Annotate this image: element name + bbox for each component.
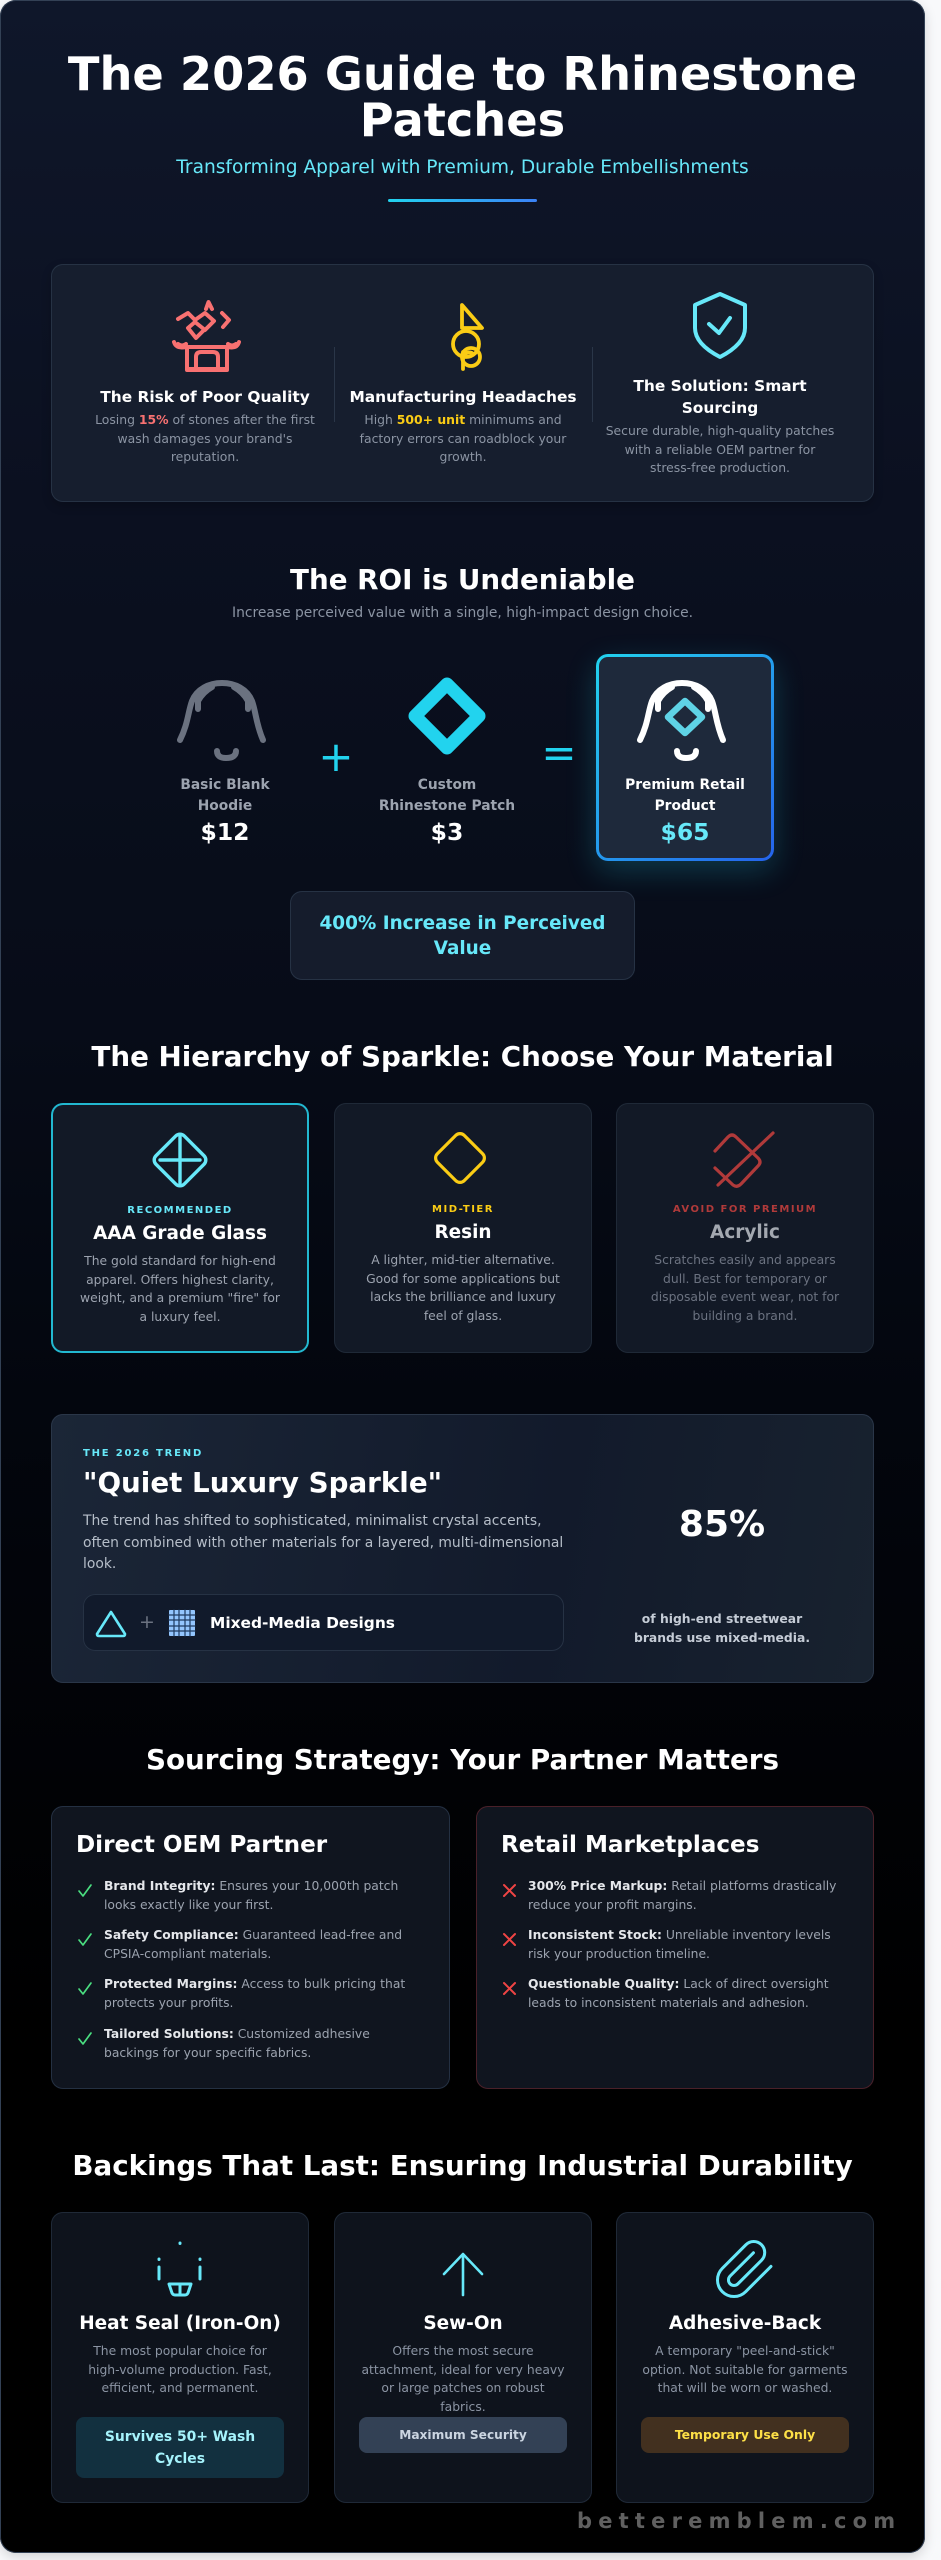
panel: sew-on	[334, 2212, 592, 2503]
price: hoodie: $12	[200, 818, 250, 846]
label: blank hoodie: Basic Blank	[180, 777, 270, 793]
heading: materials: The Hierarchy of Sparkle: Choose Your Material	[91, 1040, 834, 1073]
heading: solution: The Solution: Smart	[633, 377, 807, 395]
text: manufacturing: growth.	[439, 449, 487, 464]
description	[88, 2344, 272, 2395]
tier label: AVOID FOR PREMIUM	[673, 1204, 817, 1215]
statistic: 85%	[679, 1504, 765, 1545]
label: patch: Custom	[418, 777, 476, 793]
icon: sew-on arrow	[442, 2252, 484, 2296]
list item	[78, 1928, 402, 1961]
panel: retail marketplaces	[476, 1806, 874, 2089]
list item	[503, 1977, 829, 2010]
heading: solution: Sourcing	[682, 399, 758, 417]
description	[361, 2344, 564, 2414]
description: A temporary "peel-and-stick"	[655, 2344, 835, 2358]
heading: backings: Backings That Last: Ensuring Industrial Durability	[72, 2149, 853, 2182]
description: feel of glass.	[424, 1308, 502, 1322]
icon: resin gem	[434, 1132, 486, 1184]
icon: blank hoodie	[177, 680, 266, 761]
heading: risk: The Risk of Poor Quality	[100, 388, 310, 406]
description: a luxury feel.	[139, 1310, 221, 1324]
description: disposable event wear, not for	[651, 1290, 839, 1304]
heading: ROI: The ROI is Undeniable	[290, 563, 635, 596]
label: patch	[379, 777, 515, 814]
card: premium retail product	[596, 654, 774, 861]
title underline	[388, 199, 537, 202]
description: The gold standard for high-end	[84, 1254, 276, 1268]
title	[68, 47, 857, 147]
text: risk: Losing 15% of stones after the first	[95, 412, 315, 427]
icon: rhinestone patch	[408, 678, 486, 754]
backing name: Heat Seal (Iron-On)	[79, 2313, 281, 2334]
heading: sourcing: Sourcing Strategy: Your Partner Matters	[146, 1743, 779, 1776]
tier label: RECOMMENDED	[127, 1205, 233, 1216]
list item: 300% Price Markup: Retail platforms drastically	[528, 1879, 836, 1893]
title: The 2026 Guide to Rhinestone	[68, 47, 857, 101]
trend description: look.	[83, 1556, 116, 1572]
panel title: Retail Marketplaces	[501, 1832, 759, 1858]
description: attachment, ideal for very heavy	[361, 2362, 564, 2376]
description: The most popular choice for	[93, 2344, 267, 2358]
trend description: often combined with other materials for a layered, multi-dimensional	[83, 1534, 563, 1550]
text: manufacturing	[360, 412, 566, 464]
mixed-media label: Mixed-Media Designs	[210, 1614, 395, 1632]
list item: Tailored Solutions: Customized adhesive	[104, 2027, 370, 2041]
heading: solution	[633, 377, 807, 417]
list item	[503, 1928, 831, 1961]
price: patch: $3	[431, 818, 463, 846]
badge: Survives 50+ Wash	[105, 2429, 255, 2445]
text: risk: reputation.	[171, 449, 239, 464]
text: solution: with a reliable OEM partner for	[625, 442, 815, 456]
list item: Inconsistent Stock: Unreliable inventory levels	[528, 1928, 831, 1942]
panel: resin	[334, 1103, 592, 1353]
description: building a brand.	[693, 1308, 797, 1322]
icon: hoodie with patch	[637, 680, 726, 761]
heading: manufacturing: Manufacturing Headaches	[349, 388, 577, 406]
description	[651, 1253, 840, 1322]
mixed-media box	[83, 1594, 564, 1651]
trend description	[82, 1513, 563, 1572]
list item: reduce your profit margins.	[528, 1898, 697, 1912]
callout: value increase	[290, 891, 635, 980]
statistic caption	[634, 1612, 810, 1645]
trend description: The trend has shifted to sophisticated, minimalist crystal accents,	[83, 1513, 542, 1529]
description: high-volume production. Fast,	[88, 2362, 272, 2376]
list item: protects your profits.	[104, 1996, 233, 2010]
callout: value increase: 400% Increase in Perceived	[320, 913, 605, 934]
label: blank hoodie	[180, 777, 270, 814]
panel: 2026 trend	[51, 1414, 874, 1683]
statistic caption: brands use mixed-media.	[634, 1631, 810, 1645]
backing name: Adhesive-Back	[669, 2313, 821, 2334]
list item	[503, 1879, 836, 1912]
list item: looks exactly like your first.	[104, 1898, 273, 1912]
panel: adhesive-back	[616, 2212, 874, 2503]
trend title: "Quiet Luxury Sparkle"	[83, 1466, 442, 1499]
text: solution: stress-free production.	[650, 460, 790, 475]
list item	[78, 2027, 370, 2060]
badge	[76, 2417, 284, 2478]
description: lacks the brilliance and luxury	[370, 1290, 556, 1304]
list item: backings for your specific fabrics.	[104, 2046, 311, 2060]
icon: manufacturing headaches	[451, 303, 484, 371]
panel: glass	[51, 1103, 309, 1353]
description	[366, 1253, 560, 1322]
subtitle: Transforming Apparel with Premium, Durable Embellishments	[176, 157, 749, 178]
panel title: Direct OEM Partner	[76, 1832, 327, 1858]
description: or large patches on robust	[381, 2381, 545, 2395]
text: manufacturing: High 500+ unit minimums and	[364, 412, 562, 427]
icon: triangle	[96, 1610, 126, 1638]
equals sign: =	[541, 728, 577, 777]
description: Good for some applications but	[366, 1272, 560, 1286]
description: weight, and a premium "fire" for	[80, 1291, 280, 1305]
label: patch: Rhinestone Patch	[379, 798, 515, 814]
description	[80, 1254, 280, 1324]
badge	[359, 2417, 567, 2453]
text: risk: wash damages your brand's	[118, 430, 292, 446]
badge: Maximum Security	[399, 2428, 527, 2442]
text: risk	[95, 412, 315, 464]
list item: CPSIA-compliant materials.	[104, 1947, 271, 1961]
description: Offers the most secure	[392, 2344, 534, 2358]
label: premium product: Product	[655, 798, 715, 814]
description: that will be worn or washed.	[658, 2381, 832, 2395]
ROI subheading: Increase perceived value with a single, high-impact design choice.	[232, 605, 693, 621]
panel: direct OEM	[51, 1806, 450, 2089]
icon: mesh grid	[168, 1610, 196, 1636]
description: fabrics.	[440, 2400, 486, 2414]
material name: AAA Grade Glass	[93, 1223, 267, 1244]
list item	[78, 1977, 405, 2010]
icon: paperclip	[716, 2240, 772, 2298]
panel: problem and solution	[51, 264, 874, 502]
trend label: THE 2026 TREND	[83, 1448, 203, 1459]
callout: value increase: Value	[434, 938, 491, 959]
description: A lighter, mid-tier alternative.	[371, 1253, 555, 1267]
label: premium product: Premium Retail	[625, 777, 745, 793]
list item	[78, 1879, 398, 1912]
icon: risk of poor quality	[172, 300, 241, 372]
list item: leads to inconsistent materials and adhesion.	[528, 1996, 809, 2010]
list item: Brand Integrity: Ensures your 10,000th patch	[104, 1879, 398, 1893]
title: Patches	[360, 93, 565, 147]
badge: Temporary Use Only	[675, 2427, 815, 2442]
watermark: betteremblem.com	[577, 2509, 901, 2533]
text: solution: Secure durable, high-quality patches	[606, 423, 834, 438]
icon: acrylic crossed gem	[713, 1131, 775, 1188]
label: blank hoodie: Hoodie	[198, 798, 252, 814]
panel: heat seal	[51, 2212, 309, 2503]
text: solution	[606, 423, 834, 475]
panel: acrylic	[616, 1103, 874, 1353]
label: premium product	[625, 777, 745, 814]
icon: glass gem	[152, 1132, 208, 1188]
list item: Questionable Quality: Lack of direct oversight	[528, 1977, 829, 1991]
badge: Cycles	[155, 2451, 205, 2467]
badge	[641, 2417, 849, 2453]
tier label: MID-TIER	[432, 1204, 494, 1215]
icon: heat seal	[158, 2242, 202, 2296]
price: premium: $65	[660, 818, 710, 846]
plus sign: +	[318, 732, 354, 781]
list item: Protected Margins: Access to bulk pricing that	[104, 1977, 405, 1991]
statistic caption: of high-end streetwear	[642, 1612, 802, 1626]
icon: shield check	[693, 292, 747, 359]
plus: +	[139, 1611, 155, 1633]
material name: Acrylic	[710, 1222, 780, 1243]
description: dull. Best for temporary or	[663, 1272, 827, 1286]
description	[642, 2344, 848, 2395]
backing name: Sew-On	[423, 2313, 503, 2334]
text: manufacturing: factory errors can roadblock your	[360, 430, 566, 446]
description: Scratches easily and appears	[654, 1253, 836, 1267]
description: option. Not suitable for garments	[642, 2362, 848, 2376]
description: apparel. Offers highest clarity,	[86, 1272, 274, 1286]
list item: risk your production timeline.	[528, 1947, 710, 1961]
description: efficient, and permanent.	[102, 2381, 258, 2395]
list item: Safety Compliance: Guaranteed lead-free and	[104, 1928, 402, 1942]
material name: Resin	[434, 1222, 492, 1243]
